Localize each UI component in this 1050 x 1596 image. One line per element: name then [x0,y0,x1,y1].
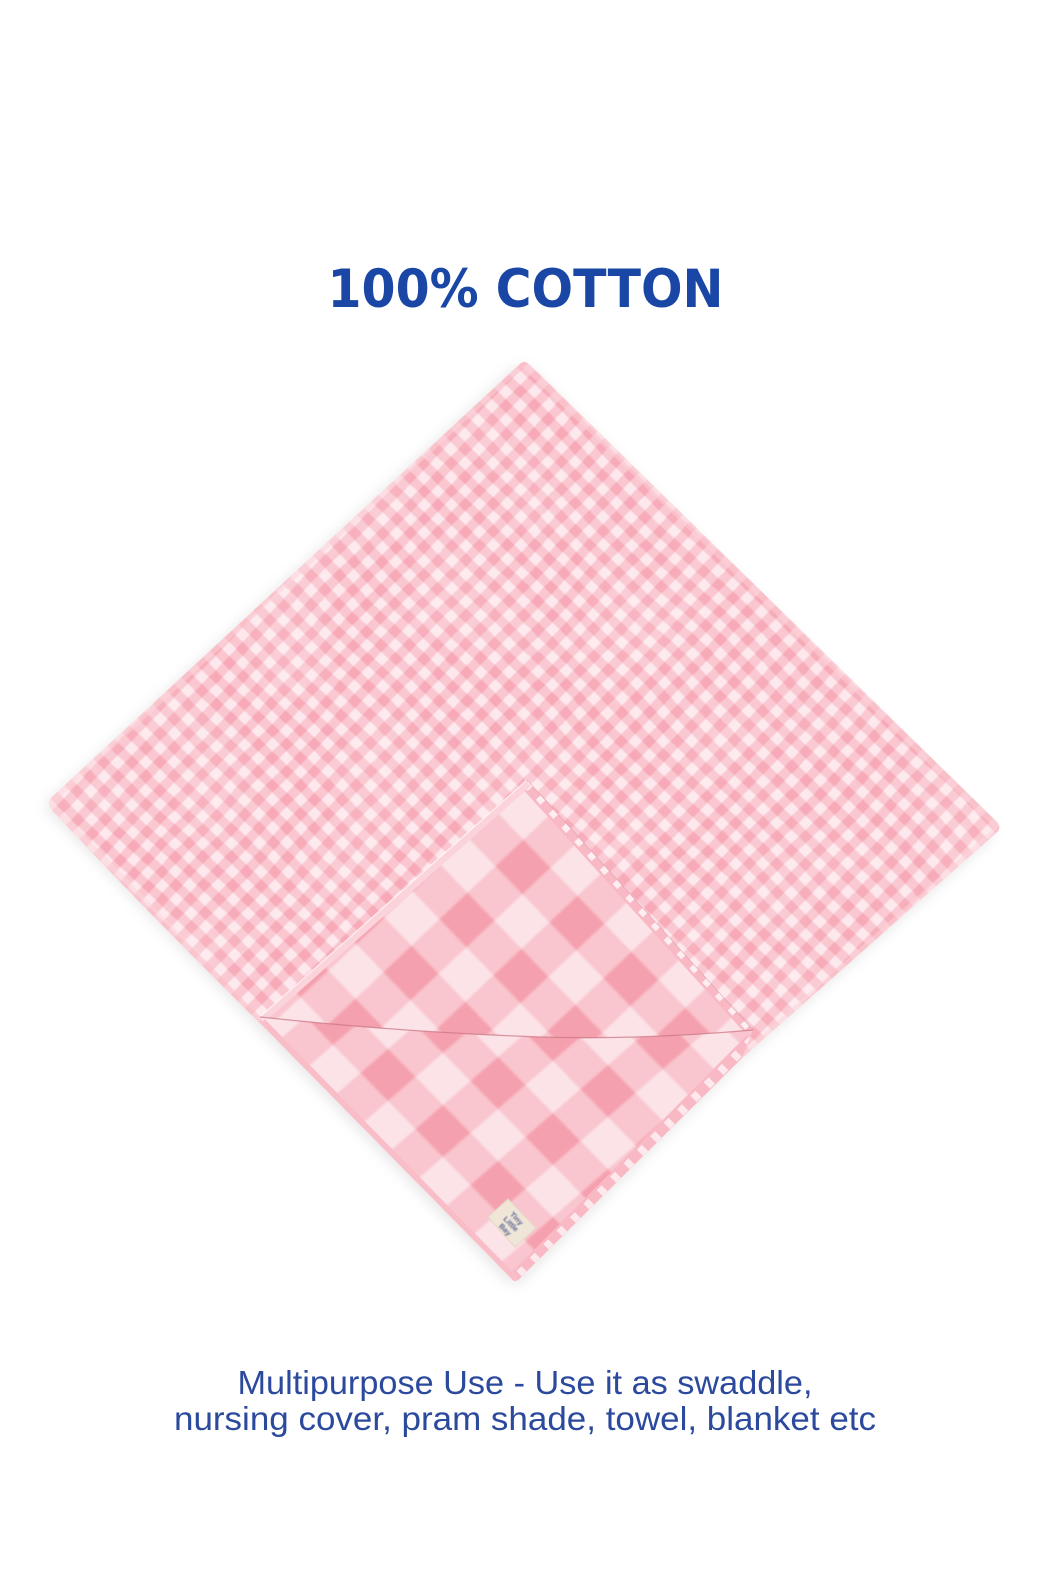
fabric label tag: Bay [497,1222,514,1238]
fabric mottling [87,429,972,996]
folded corner flap: large gingham [261,780,752,1038]
infographic canvas [46,268,1000,1437]
caption: Multipurpose Use - Use it as swaddle, [238,1364,812,1401]
lower hem: left side [262,1022,515,1280]
caption: nursing cover, pram shade, towel, blanket etc [174,1400,876,1437]
fabric label tag: Tiny [508,1210,526,1228]
fabric label tag [488,1199,536,1247]
folded corner lower panel: large gingham [260,1018,752,1281]
main cloth: small gingham [30,345,1020,1295]
fabric label tag: Little [501,1214,520,1234]
lower hem: right side [516,1040,752,1278]
flap stitched edge [260,780,527,1017]
caption [174,1364,876,1437]
product photo: gingham muslin cloth [30,345,1020,1300]
cloth shadow [45,368,993,1285]
cloth hem edges [48,362,1000,1058]
flap hem: left side [262,782,527,1017]
title: 100% COTTON [328,259,724,320]
crease line [260,1017,753,1038]
flap hem: right side [527,782,753,1030]
